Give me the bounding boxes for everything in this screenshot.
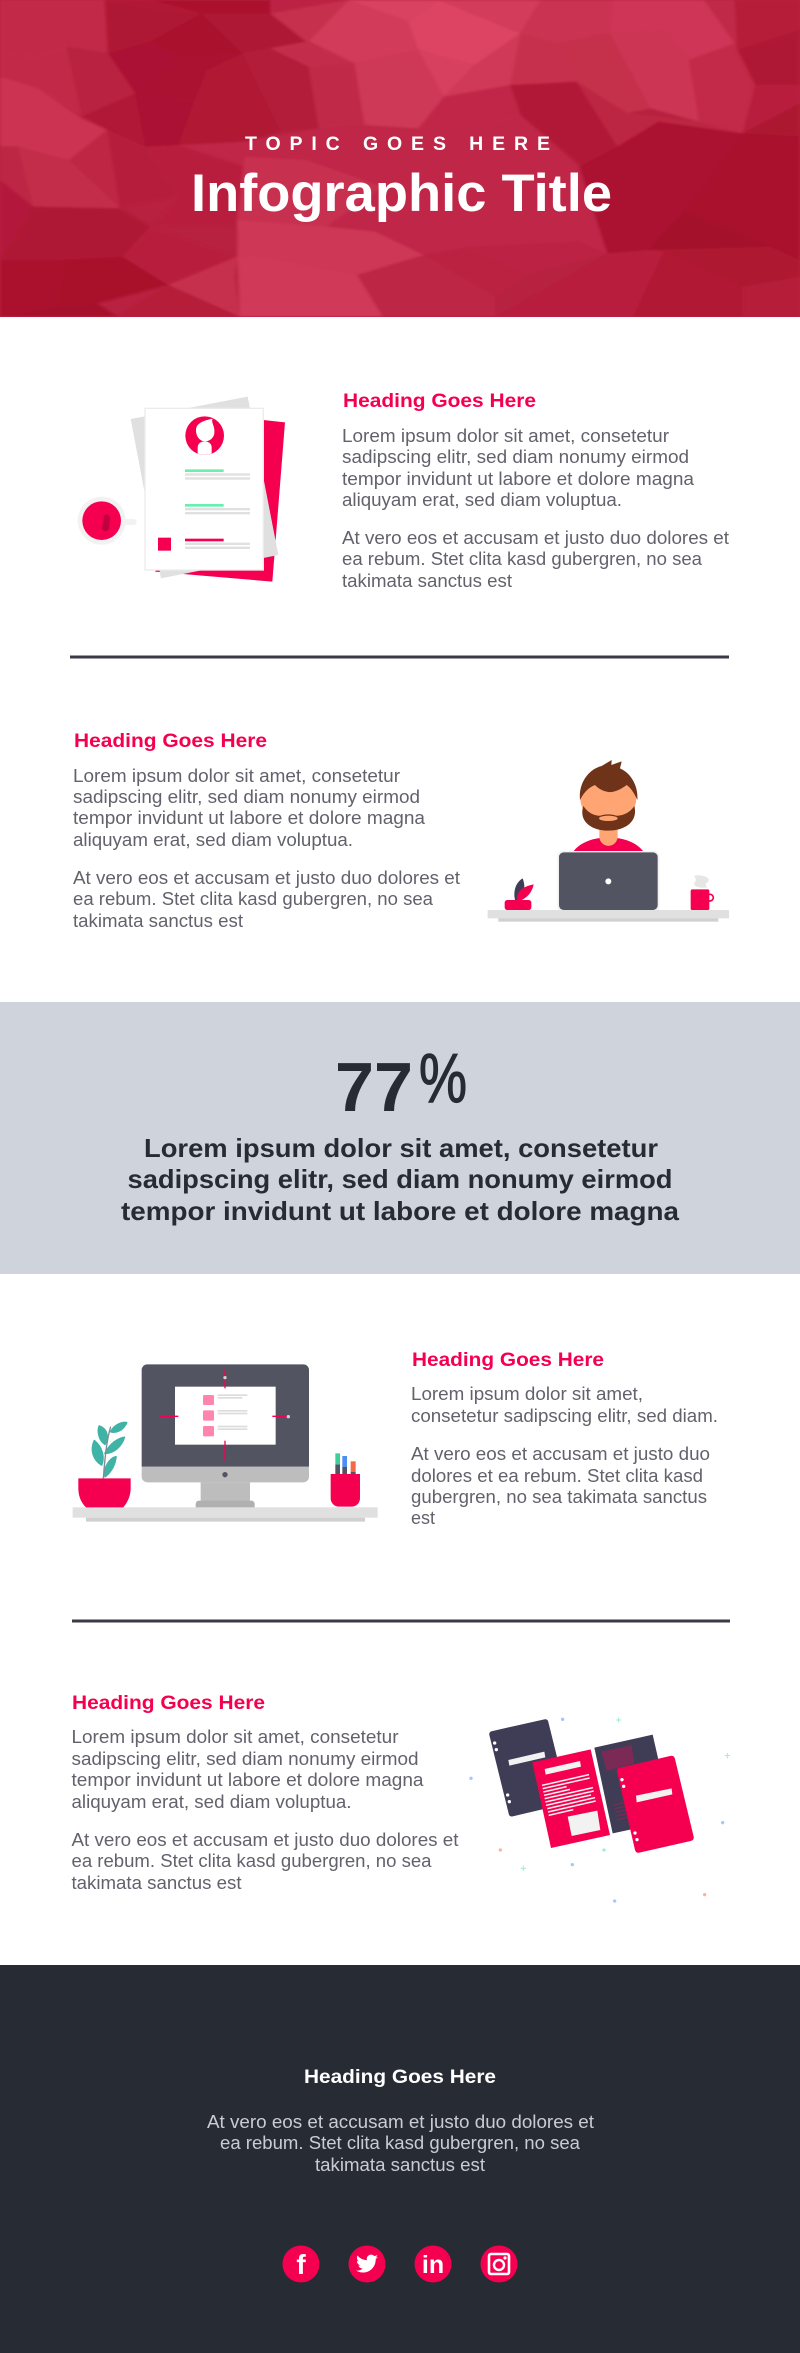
text block: gubergren, no sea takimata sanctus <box>411 1487 707 1507</box>
icon: linkedin: in <box>422 2251 444 2279</box>
panel: section two <box>73 730 729 931</box>
text block: dolores et ea rebum. Stet clita kasd <box>411 1466 703 1486</box>
text block: Lorem ipsum dolor sit amet, consetetur <box>73 766 400 786</box>
icon: linkedin <box>414 2246 452 2282</box>
main title: Infographic Title <box>191 164 612 223</box>
text block: takimata sanctus est <box>342 571 512 591</box>
footer text: At vero eos et accusam et justo duo dolores et <box>207 2112 594 2132</box>
heading: Heading Goes Here <box>412 1349 604 1371</box>
text block: ea rebum. Stet clita kasd gubergren, no sea <box>73 889 434 909</box>
footer text: ea rebum. Stet clita kasd gubergren, no sea <box>220 2133 581 2153</box>
footer heading: Heading Goes Here <box>304 2066 496 2088</box>
text block: est <box>411 1508 435 1528</box>
text block: At vero eos et accusam et justo duo dolores et <box>342 528 729 548</box>
text block: ea rebum. Stet clita kasd gubergren, no sea <box>342 549 703 569</box>
text block: tempor invidunt ut labore et dolore magna <box>342 469 695 489</box>
topic label: TOPIC GOES HERE <box>245 133 550 155</box>
text block: tempor invidunt ut labore et dolore magna <box>72 1770 425 1790</box>
panel: header banner <box>0 0 800 317</box>
icon: man at laptop <box>488 760 729 922</box>
text block <box>342 426 729 591</box>
statistic 77%: % <box>419 1039 467 1117</box>
text block: aliquyam erat, sed diam voluptua. <box>72 1792 352 1812</box>
statistic 77% <box>335 1039 467 1126</box>
footer text <box>207 2112 594 2175</box>
text block: sadipscing elitr, sed diam nonumy eirmod <box>73 787 420 807</box>
icon: instagram <box>480 2246 518 2282</box>
text block: takimata sanctus est <box>72 1873 242 1893</box>
text block: consetetur sadipscing elitr, sed diam. <box>411 1406 718 1426</box>
text block: At vero eos et accusam et justo duo dolores et <box>73 868 460 888</box>
text block: aliquyam erat, sed diam voluptua. <box>342 490 622 510</box>
text block: At vero eos et accusam et justo duo <box>411 1444 710 1464</box>
panel: section three <box>73 1349 718 1528</box>
heading: Heading Goes Here <box>72 1692 265 1714</box>
heading: Heading Goes Here <box>343 390 536 412</box>
statistic description: Lorem ipsum dolor sit amet, consetetur <box>144 1133 658 1163</box>
text block: Lorem ipsum dolor sit amet, <box>411 1384 643 1404</box>
statistic description <box>121 1133 680 1226</box>
footer text: takimata sanctus est <box>315 2155 485 2175</box>
text block: aliquyam erat, sed diam voluptua. <box>73 830 353 850</box>
panel: statistic band <box>0 1002 800 1274</box>
statistic description: tempor invidunt ut labore et dolore magna <box>121 1196 680 1226</box>
text block: sadipscing elitr, sed diam nonumy eirmod <box>72 1749 418 1769</box>
heading: Heading Goes Here <box>74 730 267 752</box>
text block <box>411 1384 718 1528</box>
icon: facebook <box>282 2246 320 2282</box>
panel: section one <box>78 390 729 591</box>
text block: takimata sanctus est <box>73 911 243 931</box>
text block <box>72 1727 458 1893</box>
text block: At vero eos et accusam et justo duo dolores et <box>72 1830 458 1850</box>
panel: section four <box>72 1692 730 1903</box>
statistic description: sadipscing elitr, sed diam nonumy eirmod <box>128 1164 672 1194</box>
panel: footer <box>0 1965 800 2353</box>
text block: tempor invidunt ut labore et dolore magna <box>73 808 426 828</box>
icon: brochures and documents <box>469 1717 730 1903</box>
text block: Lorem ipsum dolor sit amet, consetetur <box>342 426 669 446</box>
text block: ea rebum. Stet clita kasd gubergren, no sea <box>72 1851 433 1871</box>
statistic 77%: 77 <box>335 1048 413 1126</box>
text block <box>73 766 460 931</box>
text block: Lorem ipsum dolor sit amet, consetetur <box>72 1727 398 1747</box>
low-poly background <box>0 0 800 317</box>
icon: facebook: f <box>296 2249 306 2280</box>
icon: resume documents with coffee cup <box>78 397 285 582</box>
text block: sadipscing elitr, sed diam nonumy eirmod <box>342 447 689 467</box>
icon: desktop monitor with plant and pens <box>73 1364 378 1522</box>
icon: twitter <box>348 2246 386 2282</box>
